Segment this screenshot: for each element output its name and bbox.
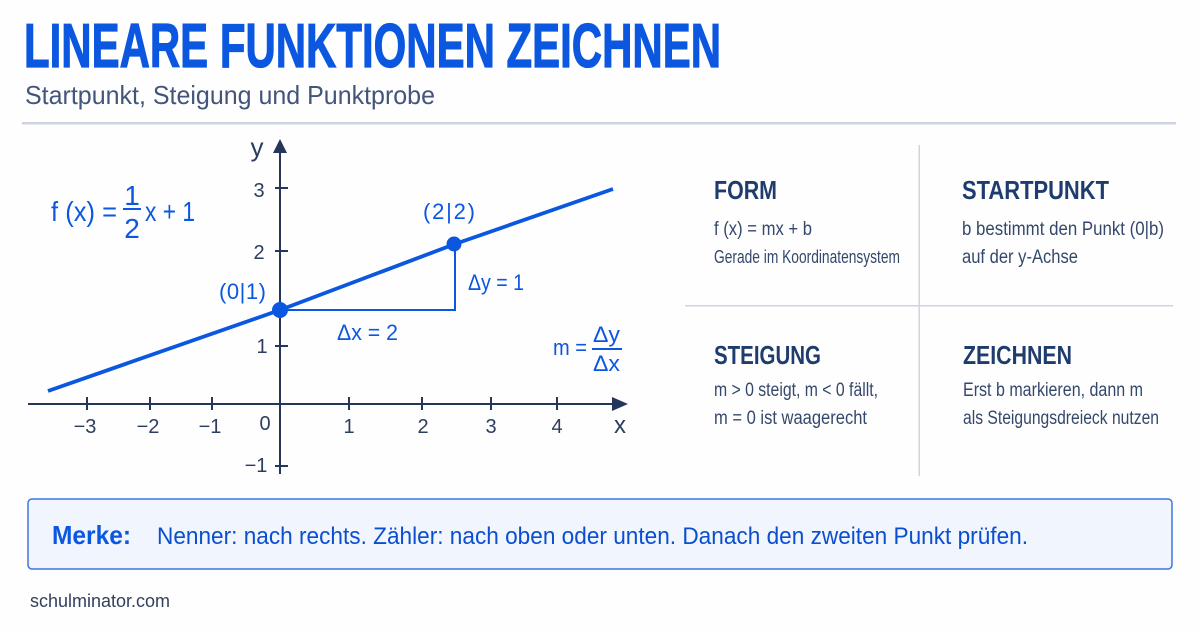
callout: Merke <box>28 499 1172 569</box>
point (0|1) <box>272 302 288 318</box>
panel: Startpunkt <box>962 175 1164 268</box>
panel: Steigung: STEIGUNG <box>714 340 821 370</box>
point labels <box>219 199 524 345</box>
x axis labels <box>74 412 626 439</box>
slope formula: Δx <box>593 351 620 376</box>
y axis labels: 2 <box>253 242 265 264</box>
x axis labels: −1 <box>199 416 221 438</box>
y axis labels: 3 <box>253 180 265 202</box>
y axis labels <box>245 132 268 477</box>
callout: Merke: Merke: <box>52 520 131 550</box>
coordinate graph <box>28 132 628 477</box>
function equation: f (x) = <box>51 196 117 227</box>
x axis labels: 3 <box>485 416 497 438</box>
point labels: Δy = 1 <box>468 270 524 295</box>
panel: Form: FORM <box>714 175 777 205</box>
panel: Startpunkt: STARTPUNKT <box>962 175 1109 205</box>
y axis labels: 1 <box>256 336 268 358</box>
y axis labels: y <box>250 132 264 162</box>
function equation: 1 <box>124 180 140 211</box>
subtitle: Startpunkt, Steigung und Punktprobe <box>25 80 435 110</box>
x axis labels: −3 <box>74 416 96 438</box>
slope formula <box>553 322 622 376</box>
function equation: x + 1 <box>145 196 195 227</box>
function equation: 2 <box>124 213 140 244</box>
panel: Form: Gerade im Koordinatensystem <box>714 247 900 267</box>
callout: Merke: Nenner: nach rechts. Zähler: nach oben oder unten. Danach den zweiten Punkt prüfen. <box>157 523 1028 550</box>
slope triangle <box>280 244 455 310</box>
x axis <box>28 397 628 411</box>
panel: Zeichnen: Erst b markieren, dann m <box>963 380 1143 401</box>
panel: Zeichnen: als Steigungsdreieck nutzen <box>963 408 1159 429</box>
x axis labels: 0 <box>259 413 271 435</box>
x axis labels: 4 <box>551 416 563 438</box>
y axis <box>273 139 288 474</box>
panel: Form: f (x) = mx + b <box>714 219 812 240</box>
x axis labels: 2 <box>417 416 429 438</box>
panel: Startpunkt: auf der y-Achse <box>962 247 1078 268</box>
x axis labels: x <box>614 412 626 439</box>
point (2|2) <box>446 236 462 252</box>
panel: Zeichnen: ZEICHNEN <box>963 340 1072 370</box>
info grid <box>685 145 1173 476</box>
panel: Zeichnen <box>963 340 1159 429</box>
function line <box>48 189 613 391</box>
title: LINEARE FUNKTIONEN ZEICHNEN <box>24 12 721 81</box>
y axis labels: −1 <box>245 455 267 477</box>
slope formula: Δy <box>593 322 620 347</box>
footer source: schulminator.com <box>30 591 170 611</box>
panel: Form <box>714 175 900 267</box>
panel: Startpunkt: b bestimmt den Punkt (0|b) <box>962 219 1164 240</box>
panel: Steigung: m > 0 steigt, m < 0 fällt, <box>714 380 878 401</box>
point labels: (2|2) <box>423 199 475 224</box>
x axis labels: −2 <box>137 416 159 438</box>
point labels: (0|1) <box>219 279 266 304</box>
x axis labels: 1 <box>343 416 355 438</box>
panel: Steigung <box>714 340 878 429</box>
panel: Steigung: m = 0 ist waagerecht <box>714 408 868 429</box>
slope formula: m = <box>553 335 587 360</box>
point labels: Δx = 2 <box>337 320 398 345</box>
function equation <box>51 180 195 244</box>
